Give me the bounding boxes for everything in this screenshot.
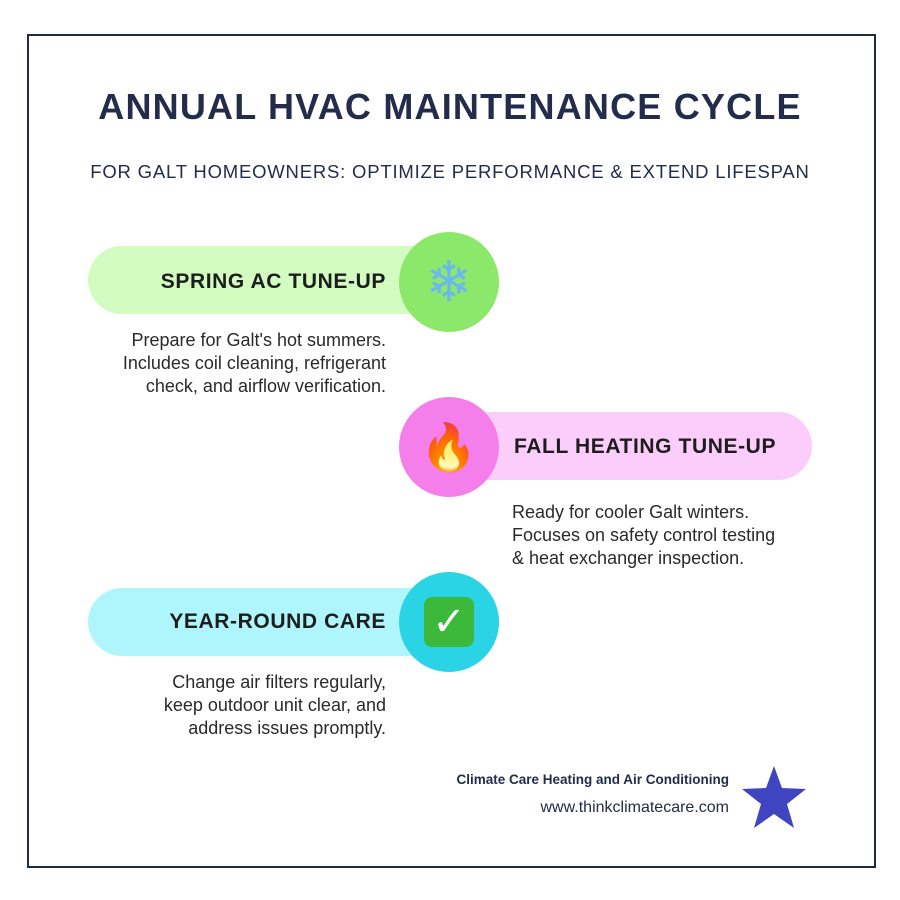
fall heading: FALL HEATING TUNE-UP — [514, 435, 776, 458]
spring description: Includes coil cleaning, refrigerant — [123, 353, 386, 373]
panel: year-round — [88, 572, 499, 738]
icon: snowflake: ❄ — [426, 250, 472, 314]
year-round description — [164, 672, 386, 738]
footer: url: www.thinkclimatecare.com — [540, 799, 729, 816]
spring pill — [88, 246, 468, 314]
title: ANNUAL HVAC MAINTENANCE CYCLE — [98, 86, 802, 127]
icon: star — [742, 766, 806, 828]
icon: check: ✓ — [432, 599, 466, 645]
spring heading: SPRING AC TUNE-UP — [161, 270, 386, 293]
footer: company: Climate Care Heating and Air Conditioning — [456, 772, 729, 787]
icon: check — [399, 572, 499, 672]
fall description — [512, 502, 775, 568]
year-round heading: YEAR-ROUND CARE — [169, 610, 386, 633]
year-round pill — [88, 588, 468, 656]
icon: fire: 🔥 — [420, 420, 478, 474]
year-round description: address issues promptly. — [188, 718, 386, 738]
spring description: check, and airflow verification. — [146, 376, 386, 396]
fall pill — [449, 412, 812, 480]
panel: spring — [88, 232, 499, 396]
year-round description: Change air filters regularly, — [172, 672, 386, 692]
panel: fall — [399, 397, 812, 568]
icon: snowflake — [399, 232, 499, 332]
fall description: & heat exchanger inspection. — [512, 548, 744, 568]
spring description: Prepare for Galt's hot summers. — [131, 330, 386, 350]
subtitle: FOR GALT HOMEOWNERS: OPTIMIZE PERFORMANCE & EXTEND LIFESPAN — [90, 161, 810, 182]
fall description: Ready for cooler Galt winters. — [512, 502, 749, 522]
year-round description: keep outdoor unit clear, and — [164, 695, 386, 715]
icon: fire — [399, 397, 499, 497]
fall description: Focuses on safety control testing — [512, 525, 775, 545]
spring description — [123, 330, 386, 396]
